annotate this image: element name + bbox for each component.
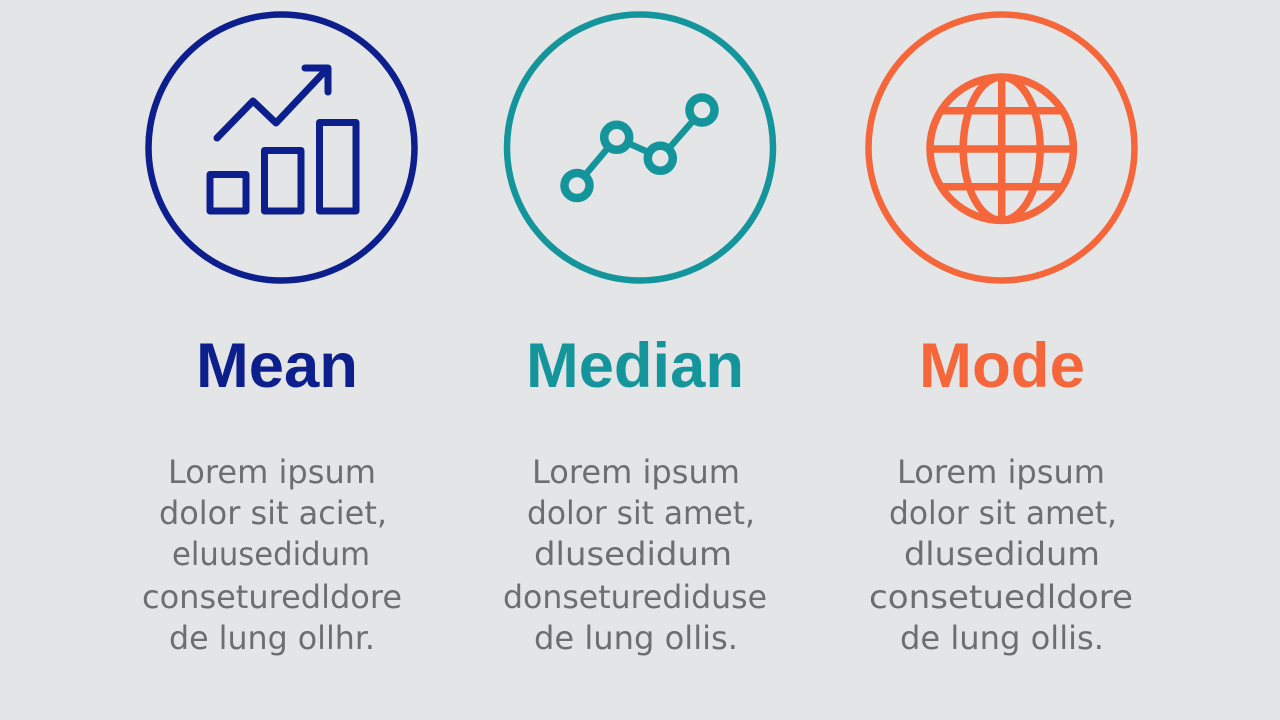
text block: median description: de lung ollis.	[534, 619, 738, 657]
heading: mode: Mode	[919, 331, 1085, 401]
text block: mean description: eluusedidum	[172, 535, 370, 573]
text block: median description: dlusedidum	[534, 535, 732, 573]
text block: mean description	[142, 453, 402, 657]
text block: median description: Lorem ipsum	[532, 453, 740, 491]
panel: mode	[868, 14, 1134, 657]
text block: mean description: Lorem ipsum	[168, 453, 376, 491]
panel: mean	[142, 14, 414, 657]
text block: median description: donseturediduse	[503, 578, 767, 616]
heading: mean: Mean	[196, 331, 358, 401]
icon: line chart with nodes	[507, 14, 773, 280]
text block: mode description: Lorem ipsum	[897, 453, 1105, 491]
text block: median description: dolor sit amet,	[527, 494, 755, 532]
text block: median description	[503, 453, 767, 657]
text block: mode description: dlusedidum	[904, 535, 1100, 573]
text block: mean description: de lung ollhr.	[169, 619, 375, 657]
icon: bar chart with rising arrow	[148, 14, 414, 280]
panel: median	[503, 14, 773, 657]
text block: mean description: conseturedldore	[142, 578, 402, 616]
text block: mode description: consetuedldore	[869, 578, 1133, 616]
text block: mean description: dolor sit aciet,	[159, 494, 387, 532]
text block: mode description: dolor sit amet,	[889, 494, 1117, 532]
text block: mode description: de lung ollis.	[900, 619, 1104, 657]
text block: mode description	[869, 453, 1133, 657]
heading: median: Median	[526, 331, 744, 401]
icon: globe	[868, 14, 1134, 280]
